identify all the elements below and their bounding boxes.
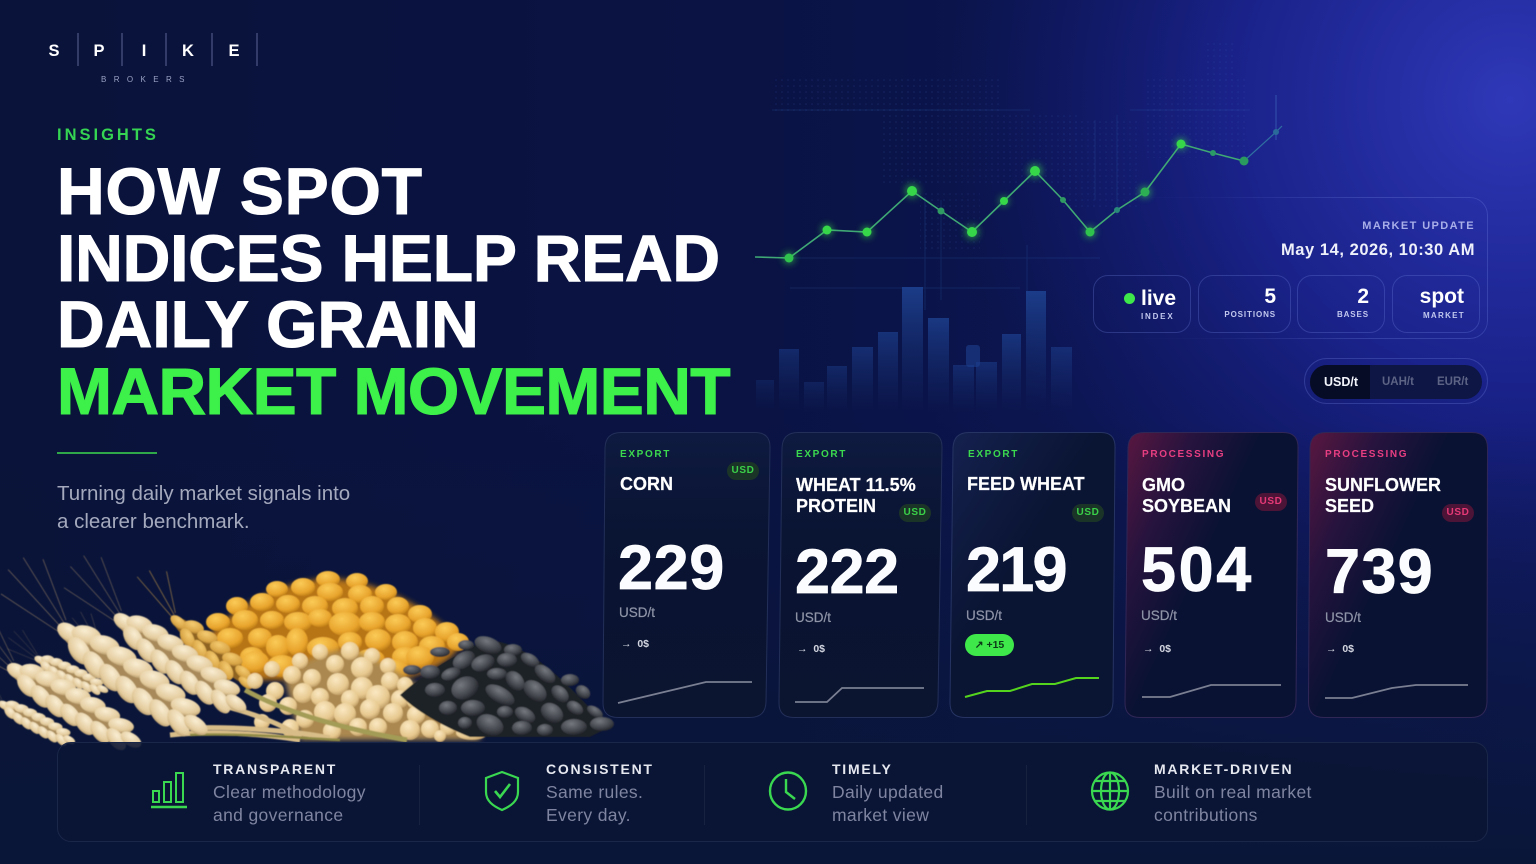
stat: positions: 5	[1264, 285, 1276, 308]
card: feed wheat: FEED WHEAT	[967, 474, 1085, 494]
subtitle	[57, 482, 350, 533]
card: feed wheat: USD/t	[966, 608, 1002, 623]
stat: spot market	[1392, 275, 1480, 333]
logo letters: P	[93, 42, 105, 60]
subtitle: Turning daily market signals into	[57, 482, 350, 505]
corn pile	[205, 571, 469, 680]
line chart with green markers	[755, 95, 1282, 268]
sunflower seed pile	[400, 633, 614, 740]
logo letters: E	[228, 42, 240, 60]
card: gmo soybean: SOYBEAN	[1142, 496, 1231, 516]
card: feed wheat: EXPORT	[968, 449, 1019, 460]
logo letters: S	[48, 42, 60, 60]
item: transparent: and governance	[213, 805, 343, 825]
card: sunflower seed: USD	[1447, 507, 1469, 518]
logo letters: K	[182, 42, 194, 60]
item: timely: TIMELY	[832, 761, 893, 777]
stat: live index	[1093, 275, 1191, 333]
market update date: May 14, 2026, 10:30 AM	[1281, 241, 1475, 259]
item: consistent	[484, 761, 654, 825]
item: consistent: Every day.	[546, 805, 631, 825]
icon: shield check	[484, 770, 520, 812]
card: corn: 229	[618, 533, 725, 603]
item: transparent	[151, 761, 366, 825]
soybean pile	[247, 642, 488, 742]
card: gmo soybean: USD	[1260, 496, 1282, 507]
logo	[48, 33, 258, 84]
item: timely	[768, 761, 944, 825]
card: corn: EXPORT	[620, 449, 671, 460]
stat: bases	[1297, 275, 1385, 333]
stat: spot market: MARKET	[1423, 311, 1465, 320]
card: gmo soybean: 504	[1141, 535, 1254, 605]
card: wheat 11.5% protein: 222	[795, 537, 899, 607]
title: INDICES HELP READ	[57, 221, 720, 295]
card: sunflower seed: → 0$	[1326, 643, 1354, 655]
sparkline	[618, 681, 752, 704]
currency toggle: USD/t	[1324, 375, 1358, 389]
stat: bases: 2	[1357, 285, 1369, 308]
item: timely: Daily updated	[832, 782, 944, 802]
currency toggle: UAH/t	[1382, 376, 1414, 388]
card: feed wheat: 219	[966, 535, 1066, 605]
illustration: grain piles and wheat	[0, 555, 614, 750]
change badge	[965, 634, 1014, 656]
card: gmo soybean	[1124, 432, 1298, 718]
title	[57, 154, 730, 428]
logo letters	[48, 33, 258, 84]
item: transparent: TRANSPARENT	[213, 761, 337, 777]
card: corn: USD	[732, 465, 754, 476]
card: gmo soybean: PROCESSING	[1142, 449, 1225, 460]
card: wheat 11.5% protein	[778, 432, 942, 718]
card: sunflower seed: USD/t	[1325, 610, 1361, 625]
icon: globe	[1090, 771, 1130, 811]
card: sunflower seed: PROCESSING	[1325, 449, 1408, 460]
decorative chart backdrop: dotted grids and volume bars	[756, 44, 1250, 398]
card: sunflower seed: 739	[1325, 537, 1434, 607]
panel: principles	[57, 742, 1488, 842]
item: market-driven	[1090, 761, 1312, 825]
card: corn: → 0$	[621, 638, 649, 650]
item: market-driven: contributions	[1154, 805, 1258, 825]
wheat ears (front) and stems	[0, 546, 407, 764]
sparkline	[1325, 684, 1468, 699]
card: corn	[602, 432, 770, 718]
wheat ears (rear)	[0, 559, 274, 754]
card: corn: USD/t	[619, 605, 655, 620]
currency toggle	[1304, 358, 1488, 404]
sparkline	[795, 687, 924, 703]
card: wheat 11.5% protein: PROTEIN	[796, 496, 876, 516]
item: timely: market view	[832, 805, 929, 825]
sparkline	[1142, 684, 1281, 698]
card: gmo soybean: USD/t	[1141, 608, 1177, 623]
logo letters: I	[142, 42, 146, 60]
card: wheat 11.5% protein: WHEAT 11.5%	[796, 475, 916, 495]
card: sunflower seed: SEED	[1325, 496, 1374, 516]
item: transparent: Clear methodology	[213, 782, 366, 802]
card: wheat 11.5% protein: USD	[904, 507, 926, 518]
card: wheat 11.5% protein: EXPORT	[796, 449, 847, 460]
card: gmo soybean: → 0$	[1143, 643, 1171, 655]
icon: bar chart	[151, 772, 187, 808]
market update label: MARKET UPDATE	[1362, 220, 1475, 232]
stat: live index: live	[1141, 287, 1176, 310]
card: feed wheat: USD	[1077, 507, 1099, 518]
card: sunflower seed	[1308, 432, 1488, 718]
card: wheat 11.5% protein: → 0$	[797, 643, 825, 655]
card: corn: CORN	[620, 474, 673, 494]
stat: positions: POSITIONS	[1224, 310, 1276, 319]
eyebrow: insights: INSIGHTS	[57, 126, 159, 144]
card: wheat 11.5% protein: USD/t	[795, 610, 831, 625]
icon: clock	[768, 771, 808, 811]
card: sunflower seed: SUNFLOWER	[1325, 475, 1441, 495]
logo letters: BROKERS	[101, 75, 192, 84]
panel: market update	[1232, 197, 1488, 339]
currency toggle: EUR/t	[1437, 376, 1468, 388]
stat: live index: INDEX	[1141, 312, 1174, 321]
change badge: ↗ +15	[975, 639, 1004, 651]
item: market-driven: MARKET-DRIVEN	[1154, 761, 1293, 777]
stat: bases: BASES	[1337, 310, 1369, 319]
title: HOW SPOT	[57, 154, 423, 228]
item: consistent: Same rules.	[546, 782, 643, 802]
title: MARKET MOVEMENT	[57, 354, 730, 428]
subtitle: a clearer benchmark.	[57, 510, 250, 533]
item: consistent: CONSISTENT	[546, 761, 654, 777]
stat: positions	[1198, 275, 1291, 333]
card: gmo soybean: GMO	[1142, 475, 1185, 495]
title: DAILY GRAIN	[57, 287, 479, 361]
sparkline	[964, 677, 1099, 698]
item: market-driven: Built on real market	[1154, 782, 1312, 802]
card: feed wheat	[950, 432, 1116, 718]
stat: spot market: spot	[1420, 285, 1464, 308]
